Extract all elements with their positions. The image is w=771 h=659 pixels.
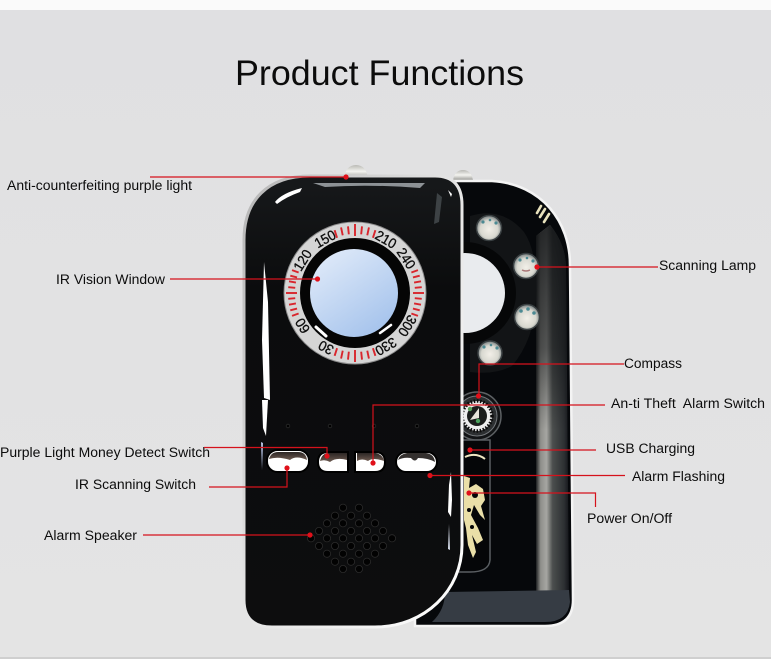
rear silver band — [536, 225, 569, 592]
callout: alarm speaker — [44, 528, 313, 543]
compass — [453, 392, 501, 440]
callout: IR scanning switch — [75, 465, 290, 492]
indicator pinholes — [286, 424, 419, 428]
dial numbers: 330 — [372, 334, 400, 359]
callout: anti-counterfeiting purple light — [7, 174, 349, 193]
front body — [244, 176, 462, 627]
callout: purple light money detect switch: Purple Light Money Detect Switch — [0, 445, 210, 460]
device: rear unit — [414, 170, 573, 626]
callout: anti-theft alarm switch — [370, 396, 765, 466]
dial numbers: 120 — [290, 246, 315, 274]
dial numbers: 30 — [315, 337, 336, 358]
title: Product Functions — [235, 54, 524, 93]
IR lens — [310, 249, 398, 337]
speaker grille — [307, 504, 396, 573]
callout: IR vision window: IR Vision Window — [56, 272, 165, 287]
callout: compass — [476, 356, 682, 399]
callout: USB charging — [467, 441, 695, 456]
callout: purple light money detect switch — [0, 445, 330, 460]
device: front unit — [244, 165, 462, 627]
callout: alarm speaker: Alarm Speaker — [44, 528, 138, 543]
callout: scanning lamp: Scanning Lamp — [659, 258, 756, 273]
dial numbers: 300 — [395, 312, 420, 340]
callout: IR scanning switch: IR Scanning Switch — [75, 477, 196, 492]
power slot — [458, 440, 490, 572]
callout: IR vision window — [56, 272, 320, 287]
callout: alarm flashing: Alarm Flashing — [632, 469, 725, 484]
callout: scanning lamp — [534, 258, 756, 273]
callout: power on/off — [466, 490, 672, 526]
rear vents — [537, 206, 549, 222]
LED lamps — [476, 216, 540, 365]
rear lens — [414, 242, 516, 344]
dial numbers — [290, 226, 420, 359]
rear knob — [453, 170, 473, 180]
gloss highlights — [261, 183, 452, 550]
dial numbers: 240 — [394, 245, 419, 272]
callout: compass: Compass — [624, 356, 682, 371]
dial ring — [284, 222, 426, 364]
switch buttons — [267, 450, 437, 472]
callout: USB charging: USB Charging — [606, 441, 695, 456]
dial numbers: 60 — [292, 315, 313, 336]
rear body — [415, 181, 573, 626]
rear bottom strip — [432, 590, 570, 622]
dial numbers: 150 — [311, 226, 339, 251]
callout: anti-theft alarm switch: An-ti Theft Alarm Switch — [611, 396, 765, 411]
rear gloss ring — [470, 213, 536, 373]
callout: anti-counterfeiting purple light: Anti-counterfeiting purple light — [7, 178, 192, 193]
rear band fade — [536, 225, 567, 430]
front knob — [344, 165, 368, 178]
dial ticks — [286, 224, 424, 362]
dial numbers: 210 — [372, 227, 400, 252]
callout: alarm flashing — [427, 469, 725, 484]
callout: power on/off: Power On/Off — [587, 511, 672, 526]
